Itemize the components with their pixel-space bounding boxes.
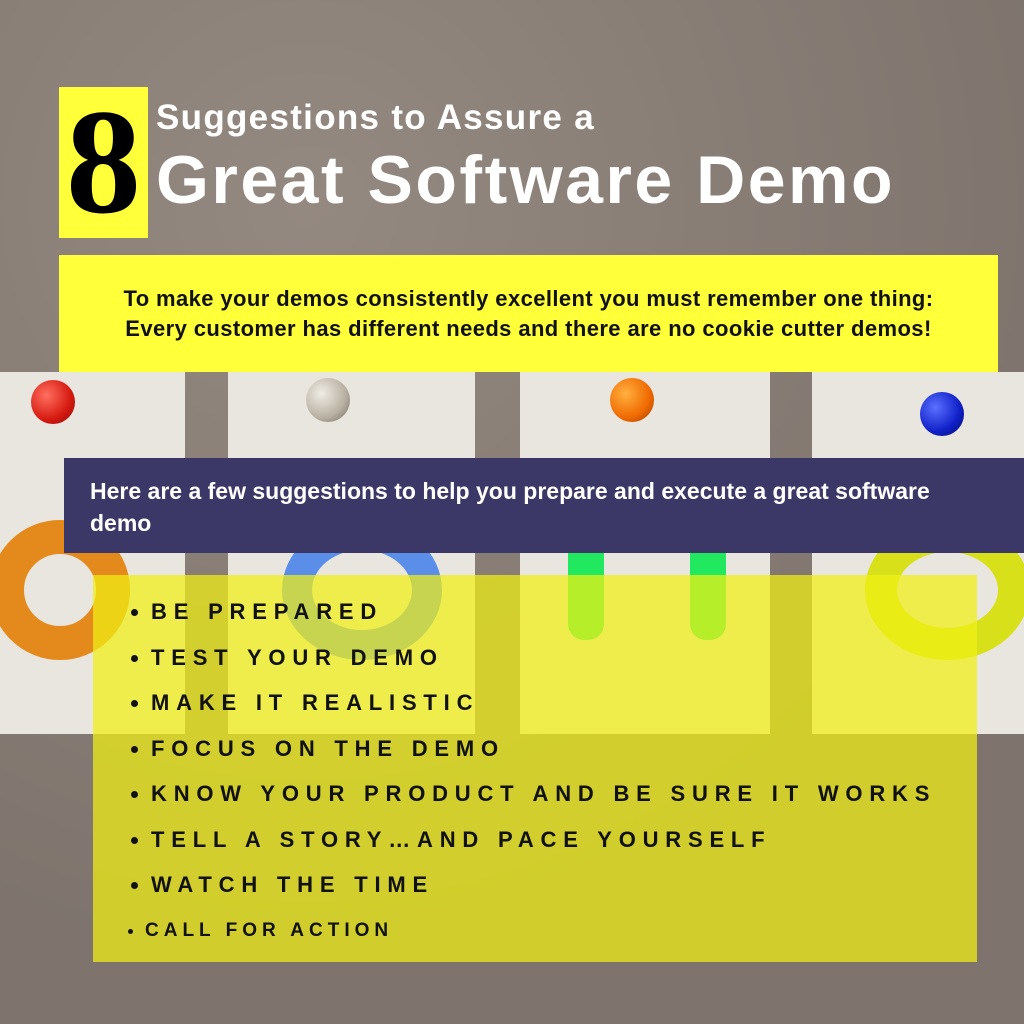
suggestions list panel [93, 575, 977, 962]
title: Suggestions to Assure a [156, 98, 595, 137]
navy subtitle band: Here are a few suggestions to help you prepare and execute a great software demo [90, 478, 930, 536]
suggestions list panel: MAKE IT REALISTIC [151, 690, 479, 715]
icon: number 8 box: 8 [66, 79, 141, 245]
suggestions list panel: FOCUS ON THE DEMO [151, 736, 505, 760]
suggestions list panel: KNOW YOUR PRODUCT AND BE SURE IT WORKS [151, 781, 936, 806]
navy subtitle band [64, 458, 1024, 553]
suggestions list panel: WATCH THE TIME [151, 872, 434, 897]
suggestions list panel: BE PREPARED [151, 599, 383, 624]
intro banner: To make your demos consistently excellent you must remember one thing: [123, 286, 934, 310]
suggestions list panel: CALL FOR ACTION [145, 920, 393, 940]
title: Great Software Demo [156, 142, 895, 218]
pins [31, 378, 964, 436]
suggestions list panel: TEST YOUR DEMO [151, 644, 444, 670]
intro banner: Every customer has different needs and there are no cookie cutter demos! [125, 316, 932, 340]
title [156, 98, 895, 218]
intro banner [59, 255, 998, 372]
suggestions list panel: TELL A STORY…AND PACE YOURSELF [151, 826, 771, 852]
